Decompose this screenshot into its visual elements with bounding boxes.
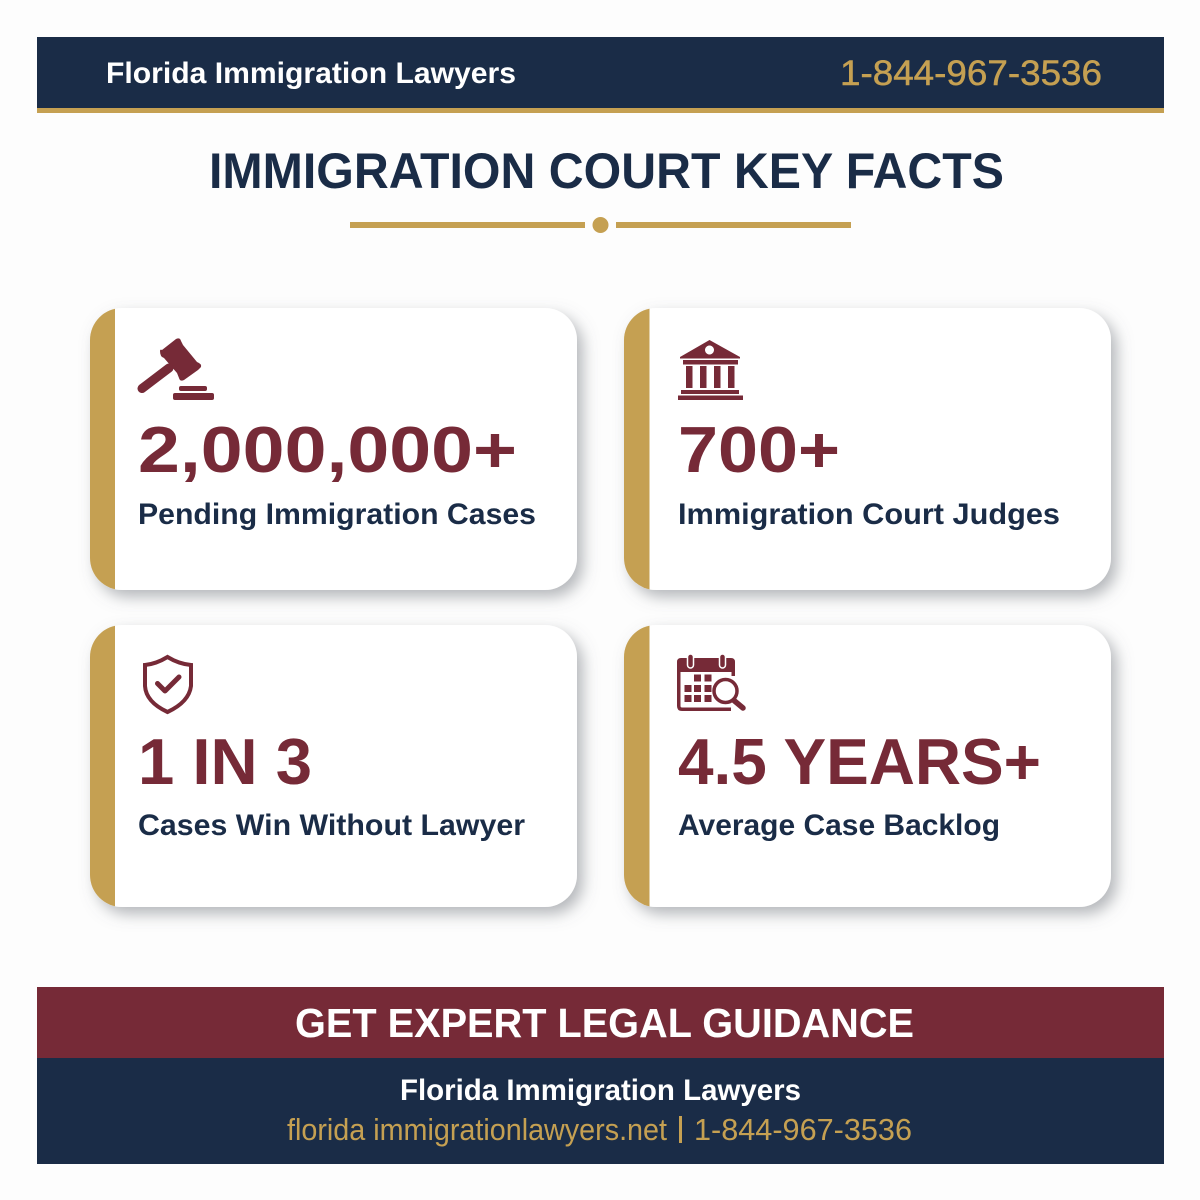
panel: judges bbox=[624, 308, 1111, 590]
panel: pending cases bbox=[90, 308, 577, 590]
stat: 4.5 years+: 4.5 YEARS+ bbox=[678, 725, 1041, 798]
call to action text: GET EXPERT LEGAL GUIDANCE bbox=[295, 1000, 914, 1046]
icon: shield with check bbox=[145, 657, 191, 712]
footer firm name: Florida Immigration Lawyers bbox=[400, 1074, 801, 1107]
icon: calendar with magnifier bbox=[677, 654, 743, 709]
header phone number: 1-844-967-3536 bbox=[840, 54, 1102, 93]
footer contact panel bbox=[37, 1058, 1164, 1164]
label: win without lawyer: Cases Win Without Lawyer bbox=[138, 809, 525, 842]
panel: case backlog bbox=[624, 625, 1111, 907]
label: pending cases: Pending Immigration Cases bbox=[138, 498, 536, 531]
stat: 1 in 3: 1 IN 3 bbox=[138, 725, 312, 798]
panel: win without lawyer bbox=[90, 625, 577, 907]
stat: 700+: 700+ bbox=[678, 413, 840, 486]
footer website and phone bbox=[287, 1112, 912, 1147]
footer website and phone: 1-844-967-3536 bbox=[694, 1112, 912, 1147]
stat: 2,000,000+: 2,000,000+ bbox=[138, 413, 517, 486]
label: judges: Immigration Court Judges bbox=[678, 498, 1060, 531]
title: IMMIGRATION COURT KEY FACTS bbox=[209, 143, 1004, 199]
footer website and phone: florida immigrationlawyers.net bbox=[287, 1112, 667, 1147]
header bar bbox=[37, 37, 1164, 113]
icon: gavel bbox=[142, 338, 214, 400]
icon: courthouse bbox=[678, 340, 743, 400]
title divider bbox=[350, 217, 851, 233]
call to action banner bbox=[37, 987, 1164, 1058]
header firm name: Florida Immigration Lawyers bbox=[106, 57, 516, 90]
label: case backlog: Average Case Backlog bbox=[678, 809, 1000, 842]
